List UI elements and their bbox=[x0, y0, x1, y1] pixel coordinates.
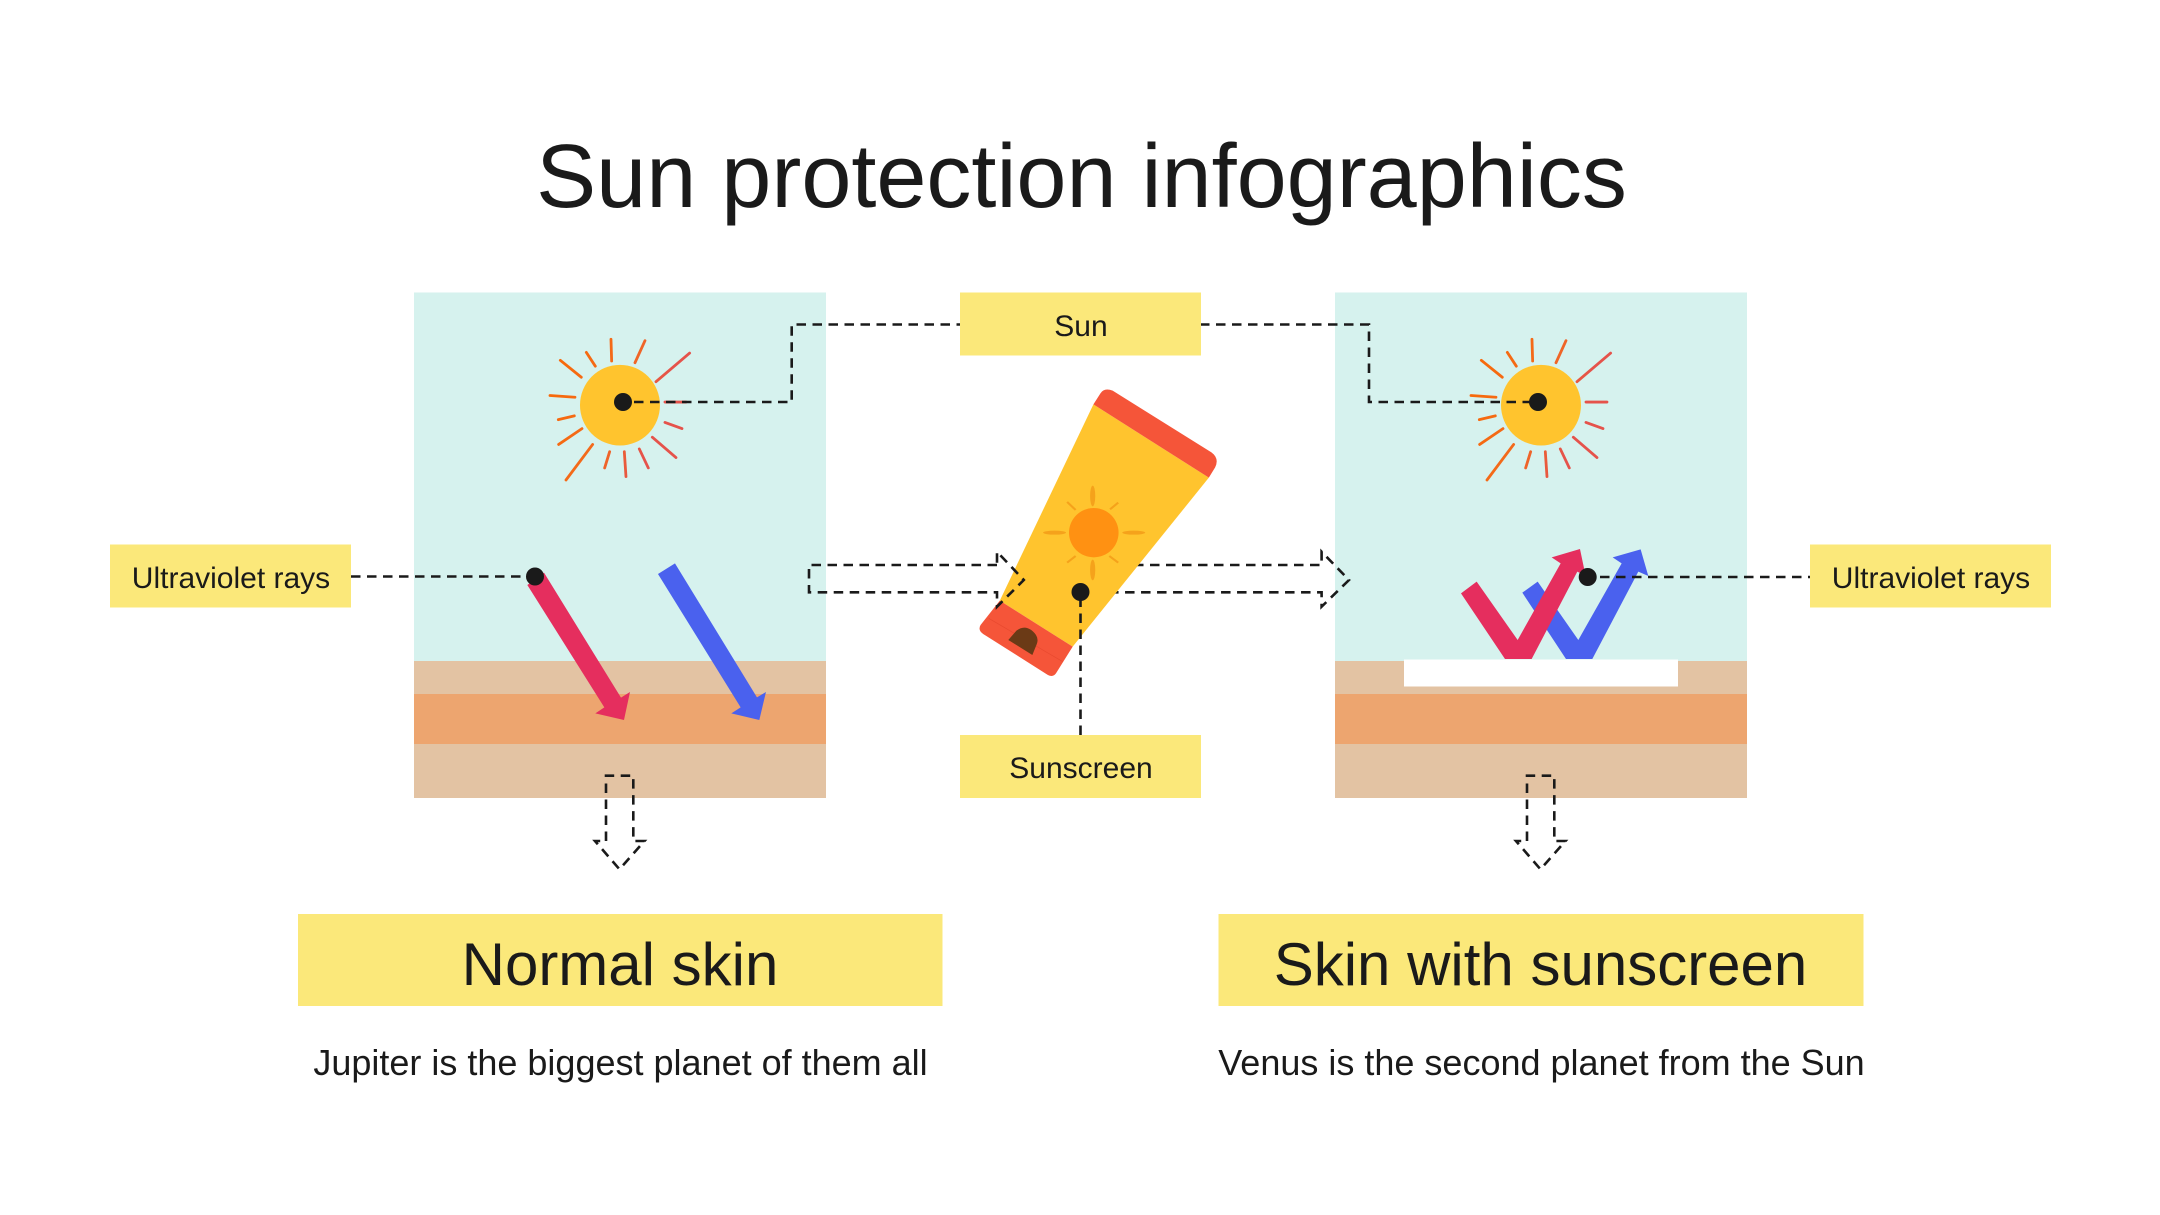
dot: right sun bbox=[1529, 393, 1547, 411]
heading: normal skin: Normal skin bbox=[462, 931, 778, 998]
label: ultraviolet rays left: Ultraviolet rays bbox=[132, 562, 330, 595]
arrow: dashed down normal skin bbox=[595, 776, 644, 869]
label: sun bbox=[960, 292, 1201, 356]
label: ultraviolet rays right bbox=[1810, 544, 2051, 608]
connector: sun label to right sun bbox=[1200, 324, 1538, 402]
icon: sun left bbox=[550, 339, 690, 480]
heading: skin with sunscreen bbox=[1218, 914, 1864, 1006]
heading: normal skin bbox=[298, 914, 942, 1006]
arrow: blue UV ray reflected bbox=[1522, 549, 1648, 659]
connector: right ultraviolet bbox=[1600, 576, 1810, 578]
label: ultraviolet rays right: Ultraviolet rays bbox=[1832, 562, 2030, 595]
dot: left ultraviolet bbox=[526, 568, 544, 586]
text: sunscreen description: Venus is the second planet from the Sun bbox=[1218, 1042, 1865, 1083]
arrow: red UV ray entering normal skin bbox=[527, 573, 630, 720]
dot: left sun bbox=[614, 393, 632, 411]
icon: sunscreen tube bbox=[980, 389, 1217, 676]
arrow: red UV ray reflected bbox=[1461, 549, 1586, 659]
label: sunscreen bbox=[960, 735, 1201, 798]
label: sun: Sun bbox=[1054, 310, 1108, 343]
dot: sunscreen bbox=[1072, 583, 1090, 601]
panel: normal skin diagram bbox=[414, 292, 826, 798]
connector: sunscreen bbox=[1079, 592, 1082, 735]
connector: left ultraviolet bbox=[351, 575, 535, 578]
sunscreen layer bbox=[1404, 660, 1678, 686]
arrow: dashed left of tube bbox=[809, 552, 1024, 607]
title: Sun protection infographics bbox=[536, 127, 1627, 227]
connector: sun label to left sun bbox=[634, 324, 960, 402]
arrow: dashed down sunscreen skin bbox=[1516, 776, 1566, 869]
panel: skin with sunscreen diagram bbox=[1335, 292, 1747, 798]
label: sunscreen: Sunscreen bbox=[1009, 752, 1153, 785]
arrow: dashed right of tube bbox=[1070, 552, 1349, 607]
text: normal skin description: Jupiter is the biggest planet of them all bbox=[313, 1042, 928, 1083]
label: ultraviolet rays left bbox=[110, 544, 351, 608]
arrow: blue UV ray entering normal skin bbox=[658, 563, 766, 720]
heading: skin with sunscreen: Skin with sunscreen bbox=[1274, 931, 1807, 998]
dot: right ultraviolet bbox=[1579, 568, 1597, 586]
icon: sun right bbox=[1471, 339, 1611, 480]
